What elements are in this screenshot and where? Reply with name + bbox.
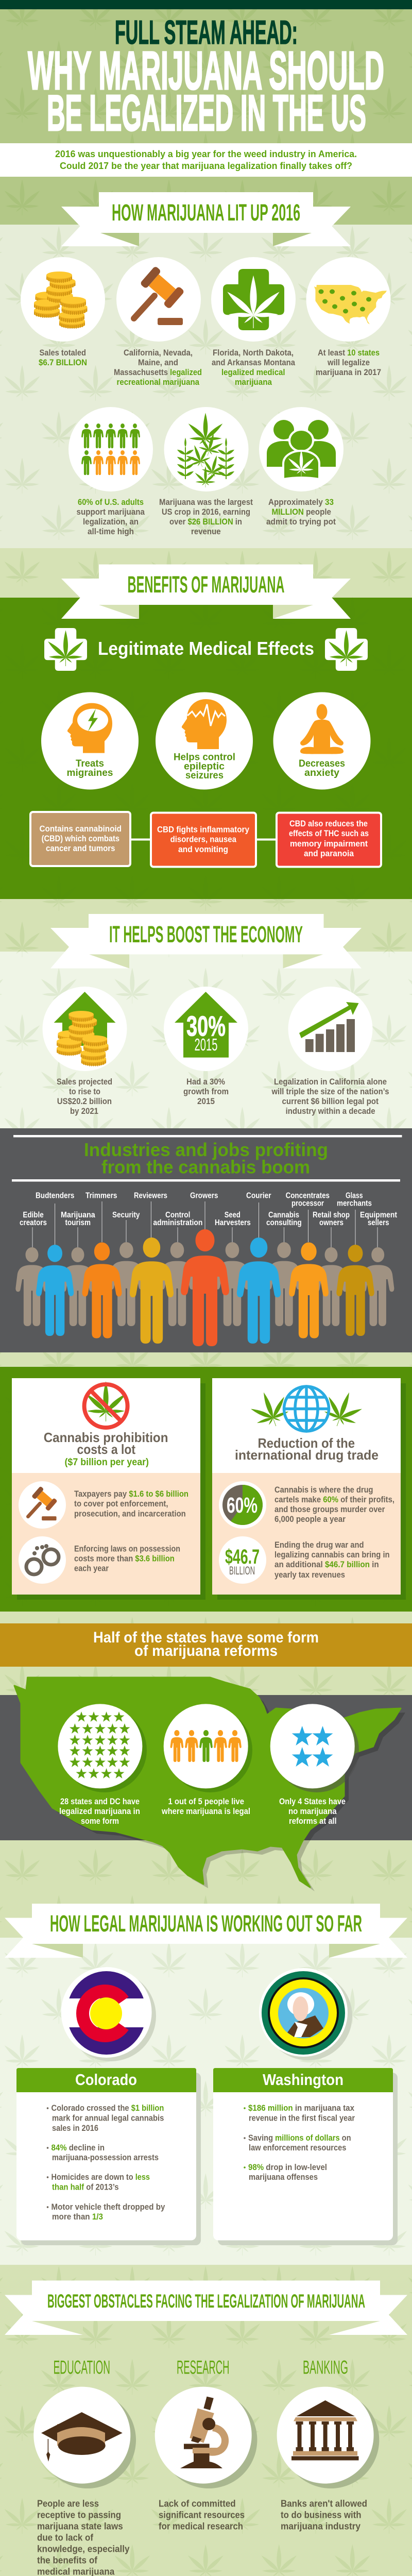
panel: reduction of drug trade: cartels make 60% of their profits, [274,1495,394,1504]
panel: epileptic seizures: Helps control [174,752,235,762]
panel: California tripling: industry within a decade [286,1107,375,1116]
panel: Washington: law enforcement resources [249,2143,346,2153]
panel: cannabis prohibition costs: Taxpayers pay $1.6 to $6 billion [74,1489,188,1499]
panel: cannabis prohibition costs: Cannabis prohibition [44,1430,168,1445]
panel: decreases anxiety: Decreases [299,758,345,769]
job labels: Retail shop [313,1211,350,1219]
job labels: merchants [337,1199,372,1208]
panel: reduction of drug trade: and those groups murder over [274,1505,385,1514]
icon: no cannabis sign [84,1381,128,1428]
heading: industries and jobs: from the cannabis boom [101,1156,310,1178]
panel: 60 percent adults [68,407,153,536]
panel: California tripling: current $6 billion legal pot [282,1097,379,1106]
panel: Colorado: mark for annual legal cannabis [52,2113,164,2123]
panel: cannabis prohibition costs: prosecution, and incarceration [74,1510,186,1519]
job labels [20,1191,397,1227]
panel: reduction of drug trade: yearly tax revenues [274,1570,345,1580]
panel: cannabis prohibition costs: costs a lot [77,1442,135,1457]
icon: microscope [180,2397,225,2468]
callout: CBD THC: effects of THC such as [289,829,369,838]
panel: cannabis prohibition costs: to cover pot enforcement, [74,1499,168,1509]
panel: banking: BANKING [303,2357,348,2378]
panel: California tripling: Legalization in California alone [274,1077,387,1087]
job labels: Seed [225,1211,241,1219]
callout: CBD cancer: (CBD) which combats [42,834,119,843]
icon: gavel [134,266,185,325]
panel: Washington [213,2068,398,2245]
panel: education: the benefits of [37,2555,98,2565]
panel: Washington: 98% drop in low-level [248,2163,327,2172]
job labels: Security [112,1211,140,1219]
job labels: Concentrates [286,1191,330,1200]
map: United States [14,1677,405,1891]
panel: Colorado: more than 1/3 [52,2212,103,2222]
panel: medical stat: legalized medical [221,368,285,377]
panel: only 4 states [270,1704,359,1826]
panel: 60 percent adults: all-time high [88,527,134,536]
panel: largest crop [159,407,253,536]
job labels: Control [165,1211,190,1219]
icon: stars [70,1711,130,1778]
panel: Colorado: marijuana-possession arrests [52,2153,159,2162]
panel: reduction of drug trade: international drug trade [235,1447,379,1463]
heading: half of the states [93,1629,319,1659]
job labels: Trimmers [85,1191,117,1200]
banner: how legal marijuana is working out [5,1904,407,1958]
panel: medical stat: and Arkansas Montana [212,358,296,367]
icon: 46.7 billion circle: $46.7 [225,1546,260,1568]
icon: left medical cross [44,628,87,671]
job labels: Edible [23,1211,44,1219]
panel: medical stat [211,257,296,387]
callout: CBD inflammatory [151,813,256,867]
job labels: sellers [368,1218,389,1227]
icon: Colorado flag [61,1967,156,2061]
icon: cannabis plants [177,413,235,487]
heading: legitimate medical effects [44,628,368,671]
icon: bank building [291,2400,358,2461]
panel: 10 states stat: At least 10 states [318,348,380,358]
panel: 33 million people: admit to trying pot [266,517,336,527]
crowd of people [15,1229,394,1346]
icon: head with pulse [182,699,227,749]
panel: 28 states: 28 states and DC have [60,1797,140,1806]
icon: 46.7 billion circle: BILLION [229,1564,255,1577]
icon: graduation cap [41,2412,123,2462]
panel: only 4 states: Only 4 States have [279,1797,346,1806]
panel: recreational stat [114,257,202,387]
panel: sales projected: Sales projected [57,1077,112,1087]
panel: education [33,2357,136,2576]
job labels: creators [20,1218,47,1227]
panel: Colorado: sales in 2016 [52,2124,98,2133]
icon: group of people with leaf [267,420,336,479]
panel: cannabis prohibition costs: Enforcing laws on possession [74,1545,180,1554]
panel: Colorado: Colorado crossed the $1 billion [52,2104,164,2113]
panel: reduction of drug trade: Ending the drug war and [274,1540,364,1550]
icon: globe with leaves [246,1386,367,1433]
banner: it helps boost the economy [50,914,362,969]
chart: 60 percent pie [219,1481,266,1529]
panel: California tripling: will triple the size of the nation’s [271,1087,389,1096]
panel: medical stat: Florida, North Dakota, [213,348,294,358]
panel: sales stat: $6.7 BILLION [39,358,87,367]
panel: sales projected: by 2021 [70,1107,98,1116]
panel: recreational stat: Massachusetts legalized [114,368,202,377]
panel: 60 percent adults: 60% of U.S. adults [78,498,144,507]
intro text [55,149,357,171]
panel: 28 states [58,1704,147,1826]
job labels: Courier [246,1191,271,1200]
panel: education: People are less [37,2499,99,2509]
panel: decreases anxiety: anxiety [304,768,339,778]
panel: epileptic seizures [156,692,253,789]
icon: arrow with coins [54,992,115,1066]
panel: banking [277,2357,379,2532]
icon: medical cross with leaf [223,269,284,330]
panel: largest crop: US crop in 2016, earning [162,507,250,517]
panel: largest crop: over $26 BILLION in [169,517,242,527]
panel: 1 out of 5: 1 out of 5 people live [168,1797,244,1806]
panel: 30 percent growth [164,987,248,1106]
icon: handcuffs circle [19,1536,66,1584]
panel: 10 states stat [306,257,390,377]
panel: 33 million people: Approximately 33 [268,498,334,507]
icon: arrow with 30% [175,992,237,1058]
panel: Colorado: 84% decline in [52,2143,105,2153]
icon: ten people [81,423,140,475]
job labels: Reviewers [134,1191,167,1200]
panel: education: knowledge, especially [37,2544,130,2554]
panel: sales projected: to rise to [69,1087,100,1096]
icon: arrow with 30%: 30% [186,1010,226,1042]
callout: CBD cancer [30,812,130,866]
panel: education: due to lack of [37,2533,94,2543]
heading: half of the states: Half of the states have some form [93,1629,319,1646]
panel: decreases anxiety [273,692,371,789]
panel: 28 states: legalized marijuana in [59,1807,140,1816]
connector lines [131,839,276,841]
panel: only 4 states: no marijuana [288,1807,337,1816]
panel: 30 percent growth: Had a 30% [186,1077,225,1087]
callout: CBD THC [277,813,381,867]
panel: research: Lack of committed [159,2499,236,2509]
panel: treats migraines: Treats [76,758,104,769]
heading: legitimate medical effects: Legitimate Medical Effects [98,638,314,659]
chart: 60 percent pie: 60% [227,1493,258,1518]
job labels: Growers [190,1191,218,1200]
icon: head with lightning [67,703,112,753]
panel: cannabis prohibition costs: costs more than $3.6 billion [74,1554,175,1563]
panel: largest crop: revenue [191,527,221,536]
panel: Colorado: than half of 2013’s [52,2182,119,2192]
title [28,13,384,141]
banner: benefits of marijuana [61,565,351,619]
panel: sales stat [21,257,105,367]
job labels: owners [319,1218,344,1227]
callout: CBD THC: and paranoia [304,849,354,858]
job labels: Equipment [360,1211,397,1219]
job labels: Budtenders [36,1191,74,1200]
callout: CBD inflammatory: disorders, nausea [170,835,237,844]
panel: treats migraines [41,692,139,789]
job labels: tourism [65,1218,91,1227]
panel: banking: marijuana industry [281,2521,360,2532]
panel: 10 states stat: marijuana in 2017 [316,368,381,377]
panel: research [155,2357,257,2532]
panel: only 4 states: reforms at all [289,1817,337,1826]
panel: 30 percent growth: growth from [183,1087,229,1096]
panel: Washington: revenue in the first fiscal year [249,2113,355,2123]
panel: 33 million people: MILLION people [272,507,331,517]
panel: cannabis prohibition costs: each year [74,1564,109,1573]
panel: Colorado [16,2068,201,2245]
panel: banking: Banks aren't allowed [281,2499,367,2509]
panel: Washington: $186 million in marijuana tax [248,2104,355,2113]
banner: how marijuana lit up 2016 [61,192,351,246]
panel: 1 out of 5 [161,1704,252,1816]
panel: sales projected: US$20.2 billion [57,1097,112,1106]
job labels: Marijuana [61,1211,95,1219]
icon: coins [34,272,88,329]
icon: US map with dots [314,285,387,325]
panel: 30 percent growth: 2015 [197,1097,215,1106]
intro text: Could 2017 be the year that marijuana legalization finally takes off? [60,161,352,171]
panel: research: for medical research [159,2521,243,2532]
banner: biggest obstacles [5,2280,407,2335]
panel: Washington: Washington [263,2071,344,2089]
panel: 10 states stat: will legalize [327,358,370,367]
icon: arrow with 30%: 2015 [195,1035,217,1054]
panel: 33 million people [259,407,344,527]
icon: four stars [292,1726,333,1767]
panel: reduction of drug trade: 6,000 people a year [274,1515,346,1524]
panel: Washington: Saving millions of dollars on [248,2133,351,2143]
panel: cannabis prohibition costs: ($7 billion per year) [65,1457,149,1468]
panel: reduction of drug trade: Cannabis is where the drug [274,1485,373,1495]
panel: education: receptive to passing [37,2510,121,2520]
heading: industries and jobs: Industries and jobs profiting [84,1139,328,1160]
callout: CBD cancer: Contains cannabinoid [39,824,122,834]
heading: industries and jobs [12,1135,402,1182]
icon: right medical cross [325,628,368,671]
panel: 60 percent adults: legalization, an [83,517,139,527]
panel: sales stat: Sales totaled [39,348,86,358]
icon: five people [170,1730,242,1762]
panel: cannabis prohibition costs [12,1378,205,1600]
panel: Colorado: Homicides are down to less [52,2173,150,2182]
panel: sales projected [42,987,127,1116]
panel: recreational stat: Maine, and [138,358,178,367]
panel: Washington: marijuana offenses [249,2173,318,2182]
panel: reduction of drug trade: legalizing cannabis can bring in [274,1550,390,1560]
panel: banking: to do business with [281,2510,362,2520]
panel: reduction of drug trade: an additional $46.7 billion in [274,1560,379,1569]
panel: epileptic seizures: seizures [185,770,224,781]
panel: reduction of drug trade [212,1378,406,1600]
job labels: Harvesters [215,1218,251,1227]
job labels: Cannabis [268,1211,299,1219]
job labels: processor [291,1199,324,1208]
icon: gavel circle [19,1481,66,1529]
panel: California tripling [271,987,389,1116]
icon: 46.7 billion circle [219,1536,266,1584]
panel: recreational stat: California, Nevada, [124,348,193,358]
panel: epileptic seizures: epileptic [184,761,225,772]
callout: CBD inflammatory: and vomiting [178,845,228,854]
callout: CBD cancer: cancer and tumors [46,844,115,853]
panel: education: marijuana state laws [37,2521,123,2532]
panel: Colorado: Colorado [75,2071,137,2089]
callout: CBD inflammatory: CBD fights inflammatory [157,825,250,835]
panel: medical stat: marijuana [235,378,272,387]
panel: treats migraines: migraines [67,768,113,778]
job labels: Glass [346,1191,363,1200]
icon: meditating figure [300,704,344,754]
panel: research: RESEARCH [177,2357,229,2378]
panel: 60 percent adults: support marijuana [76,507,145,517]
job labels: consulting [266,1218,302,1227]
callout: CBD THC: CBD also reduces the [289,819,368,828]
panel: research: significant resources [159,2510,245,2520]
heading: half of the states: of marijuana reforms [134,1642,278,1659]
panel: reduction of drug trade: Reduction of the [258,1435,355,1451]
callout: CBD THC: memory impairment [290,839,368,849]
icon: Washington seal [259,1968,352,2060]
panel: education: EDUCATION [54,2357,110,2378]
panel: largest crop: Marijuana was the largest [159,498,253,507]
panel: 1 out of 5: where marijuana is legal [161,1807,250,1816]
panel: Colorado: Motor vehicle theft dropped by [52,2202,165,2212]
job labels: administration [153,1218,202,1227]
icon: rising bar chart [299,1002,358,1052]
panel: recreational stat: recreational marijuana [116,378,200,387]
panel: 28 states: some form [81,1817,119,1826]
intro text: 2016 was unquestionably a big year for the weed industry in America. [55,149,357,159]
